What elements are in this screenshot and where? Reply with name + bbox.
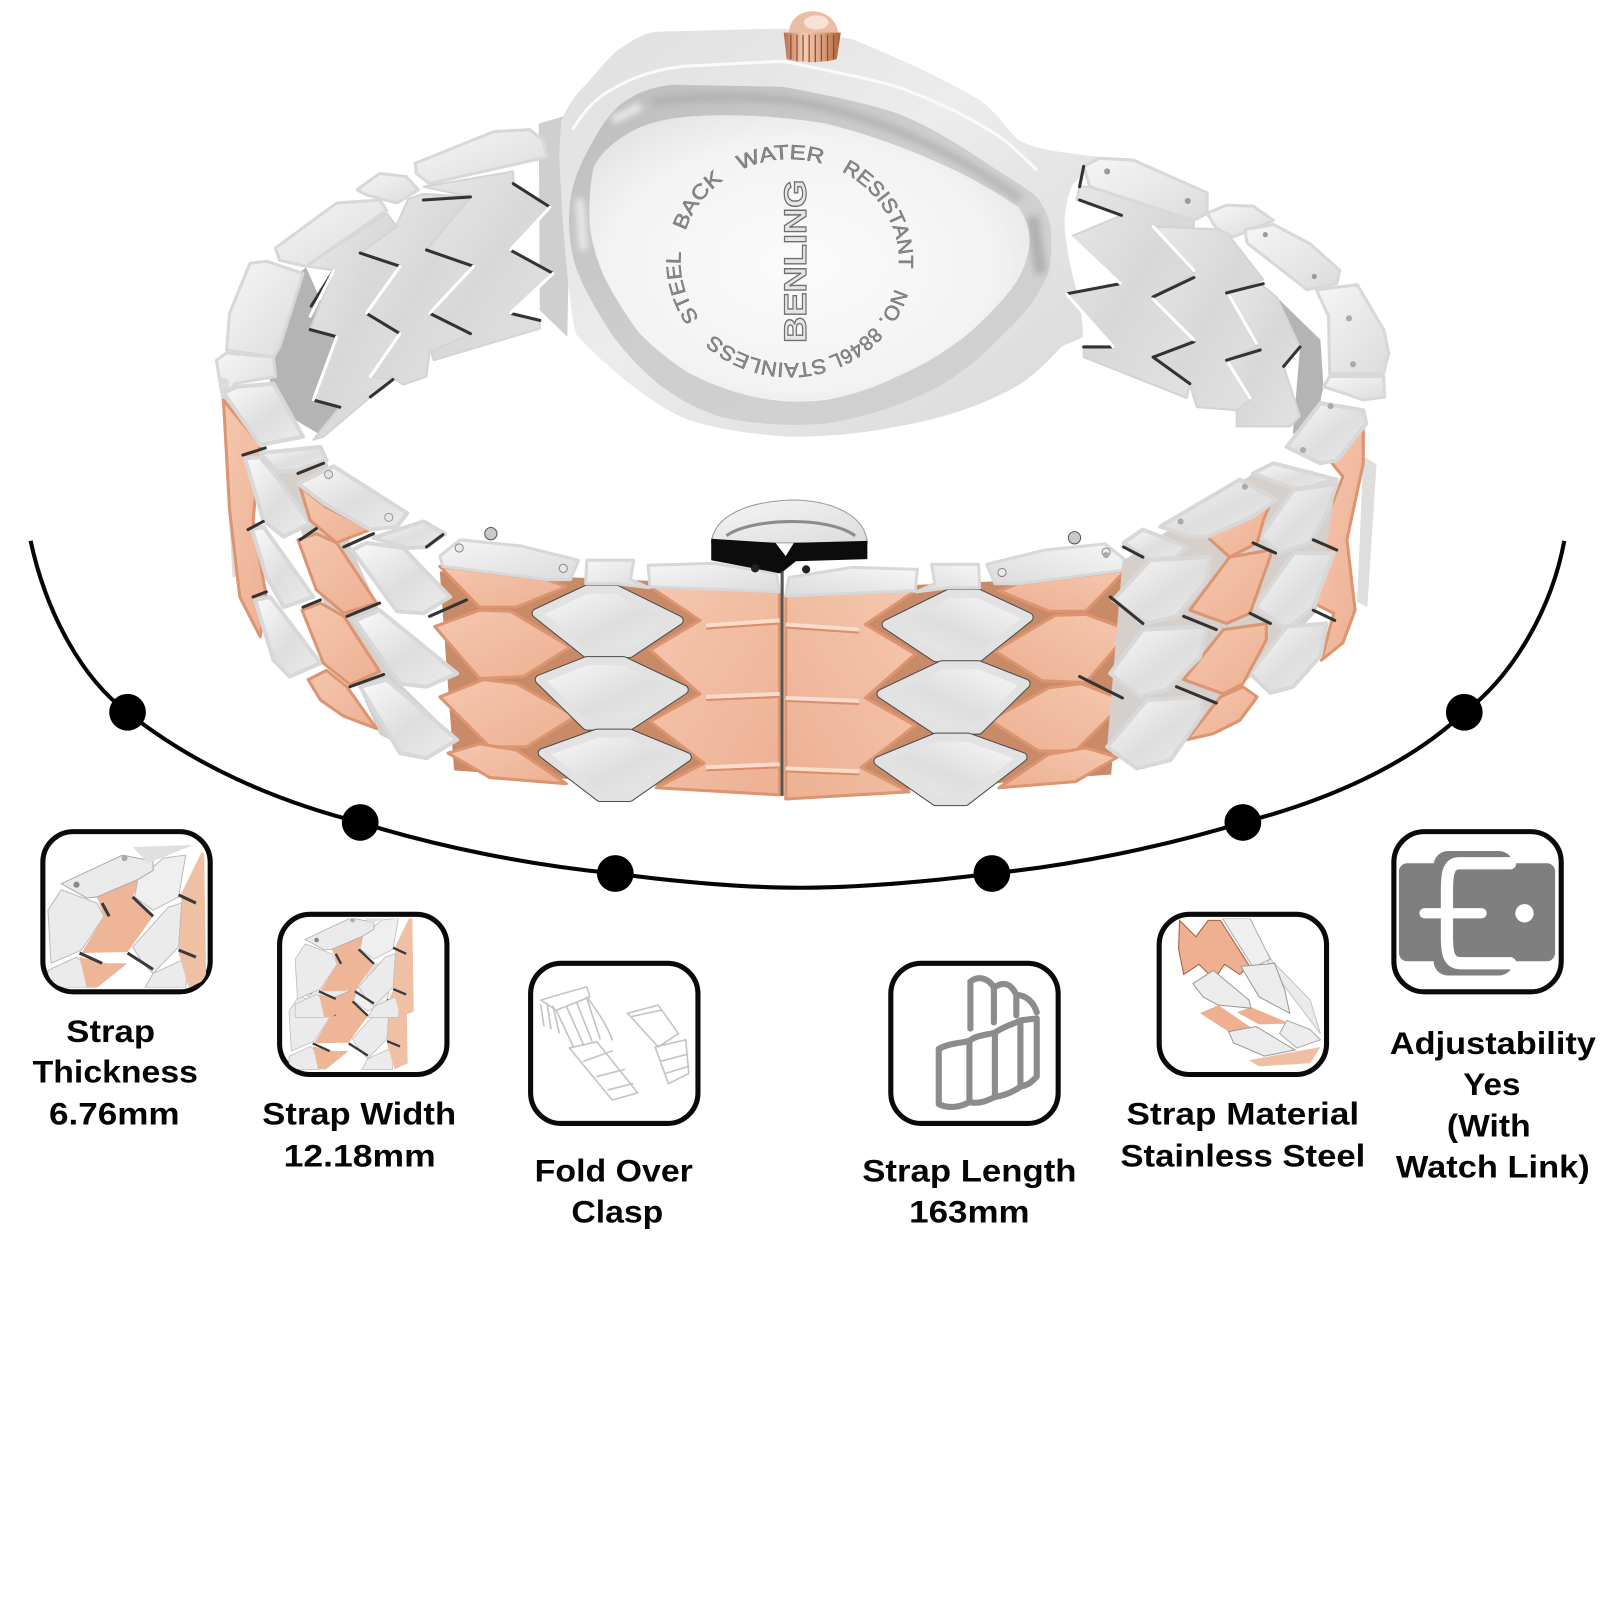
panel: strap thickness	[33, 832, 210, 1131]
upper bracelet, right side	[1066, 158, 1389, 434]
thumbnail: strap links	[289, 910, 414, 1069]
case outer shell	[559, 29, 1100, 437]
back plate	[589, 115, 1030, 402]
fold-over clasp	[711, 500, 867, 796]
thumbnail: strap links	[48, 845, 206, 988]
engraved ring text: WATER	[734, 144, 824, 168]
icon frame	[531, 963, 698, 1123]
engraved ring text: 8846L	[828, 328, 882, 368]
panel: strap length	[862, 963, 1077, 1229]
icon: belt buckle	[1399, 851, 1555, 976]
label: Stainless Steel	[1120, 1137, 1365, 1173]
label	[535, 1153, 693, 1229]
icon frame	[1159, 914, 1327, 1074]
icon: strap segments	[939, 978, 1037, 1107]
watch case back	[538, 28, 1098, 437]
crown	[784, 11, 841, 62]
engraved ring text	[666, 144, 914, 378]
engraved ring text: STAINLESS	[707, 336, 826, 378]
label: Clasp	[571, 1193, 663, 1229]
ring reflections	[580, 97, 1041, 273]
label: Strap	[66, 1013, 155, 1049]
icon frame	[43, 832, 210, 992]
label: Fold Over	[535, 1153, 693, 1189]
upper bracelet, left side	[216, 130, 553, 440]
engraved ring text: STEEL	[666, 252, 698, 324]
lower strap, inner left links	[435, 528, 780, 797]
thumbnail: strap material	[1179, 918, 1320, 1066]
label	[862, 1153, 1077, 1229]
engraved brand: BENLING	[777, 180, 813, 343]
icon frame	[891, 963, 1058, 1123]
lower strap, outer right links	[1080, 403, 1377, 768]
case lugs	[539, 114, 571, 337]
engraved ring text: BACK	[672, 170, 724, 230]
label: Yes	[1463, 1066, 1520, 1102]
panel: adjustability	[1390, 832, 1596, 1185]
label	[262, 1095, 456, 1173]
label: Strap Material	[1127, 1095, 1359, 1131]
label: Strap Width	[262, 1095, 456, 1131]
engraved ring text: RESISTANT	[842, 160, 914, 268]
curved timeline	[31, 541, 1564, 892]
lower strap, inner right links	[786, 532, 1131, 801]
label: Watch Link)	[1396, 1149, 1590, 1185]
lower strap, outer left links	[220, 377, 466, 758]
engraved ring text: NO.	[879, 290, 908, 321]
panel: strap material	[1120, 914, 1365, 1173]
case inner ring	[569, 85, 1051, 425]
label: 12.18mm	[284, 1137, 436, 1173]
panel: fold over clasp	[531, 963, 698, 1229]
case step highlight	[572, 61, 1037, 170]
icon frame	[280, 914, 447, 1074]
icon frame	[1394, 832, 1561, 992]
label: (With	[1447, 1108, 1531, 1144]
label	[1390, 1025, 1596, 1185]
label: Thickness	[33, 1054, 198, 1090]
label: Adjustability	[1390, 1025, 1596, 1061]
panel: strap width	[262, 910, 456, 1173]
label	[1120, 1095, 1365, 1173]
label	[33, 1013, 198, 1131]
label: 6.76mm	[49, 1095, 180, 1131]
label: Strap Length	[862, 1153, 1077, 1189]
label: 163mm	[909, 1193, 1030, 1229]
icon: clasp line drawing	[541, 987, 689, 1100]
